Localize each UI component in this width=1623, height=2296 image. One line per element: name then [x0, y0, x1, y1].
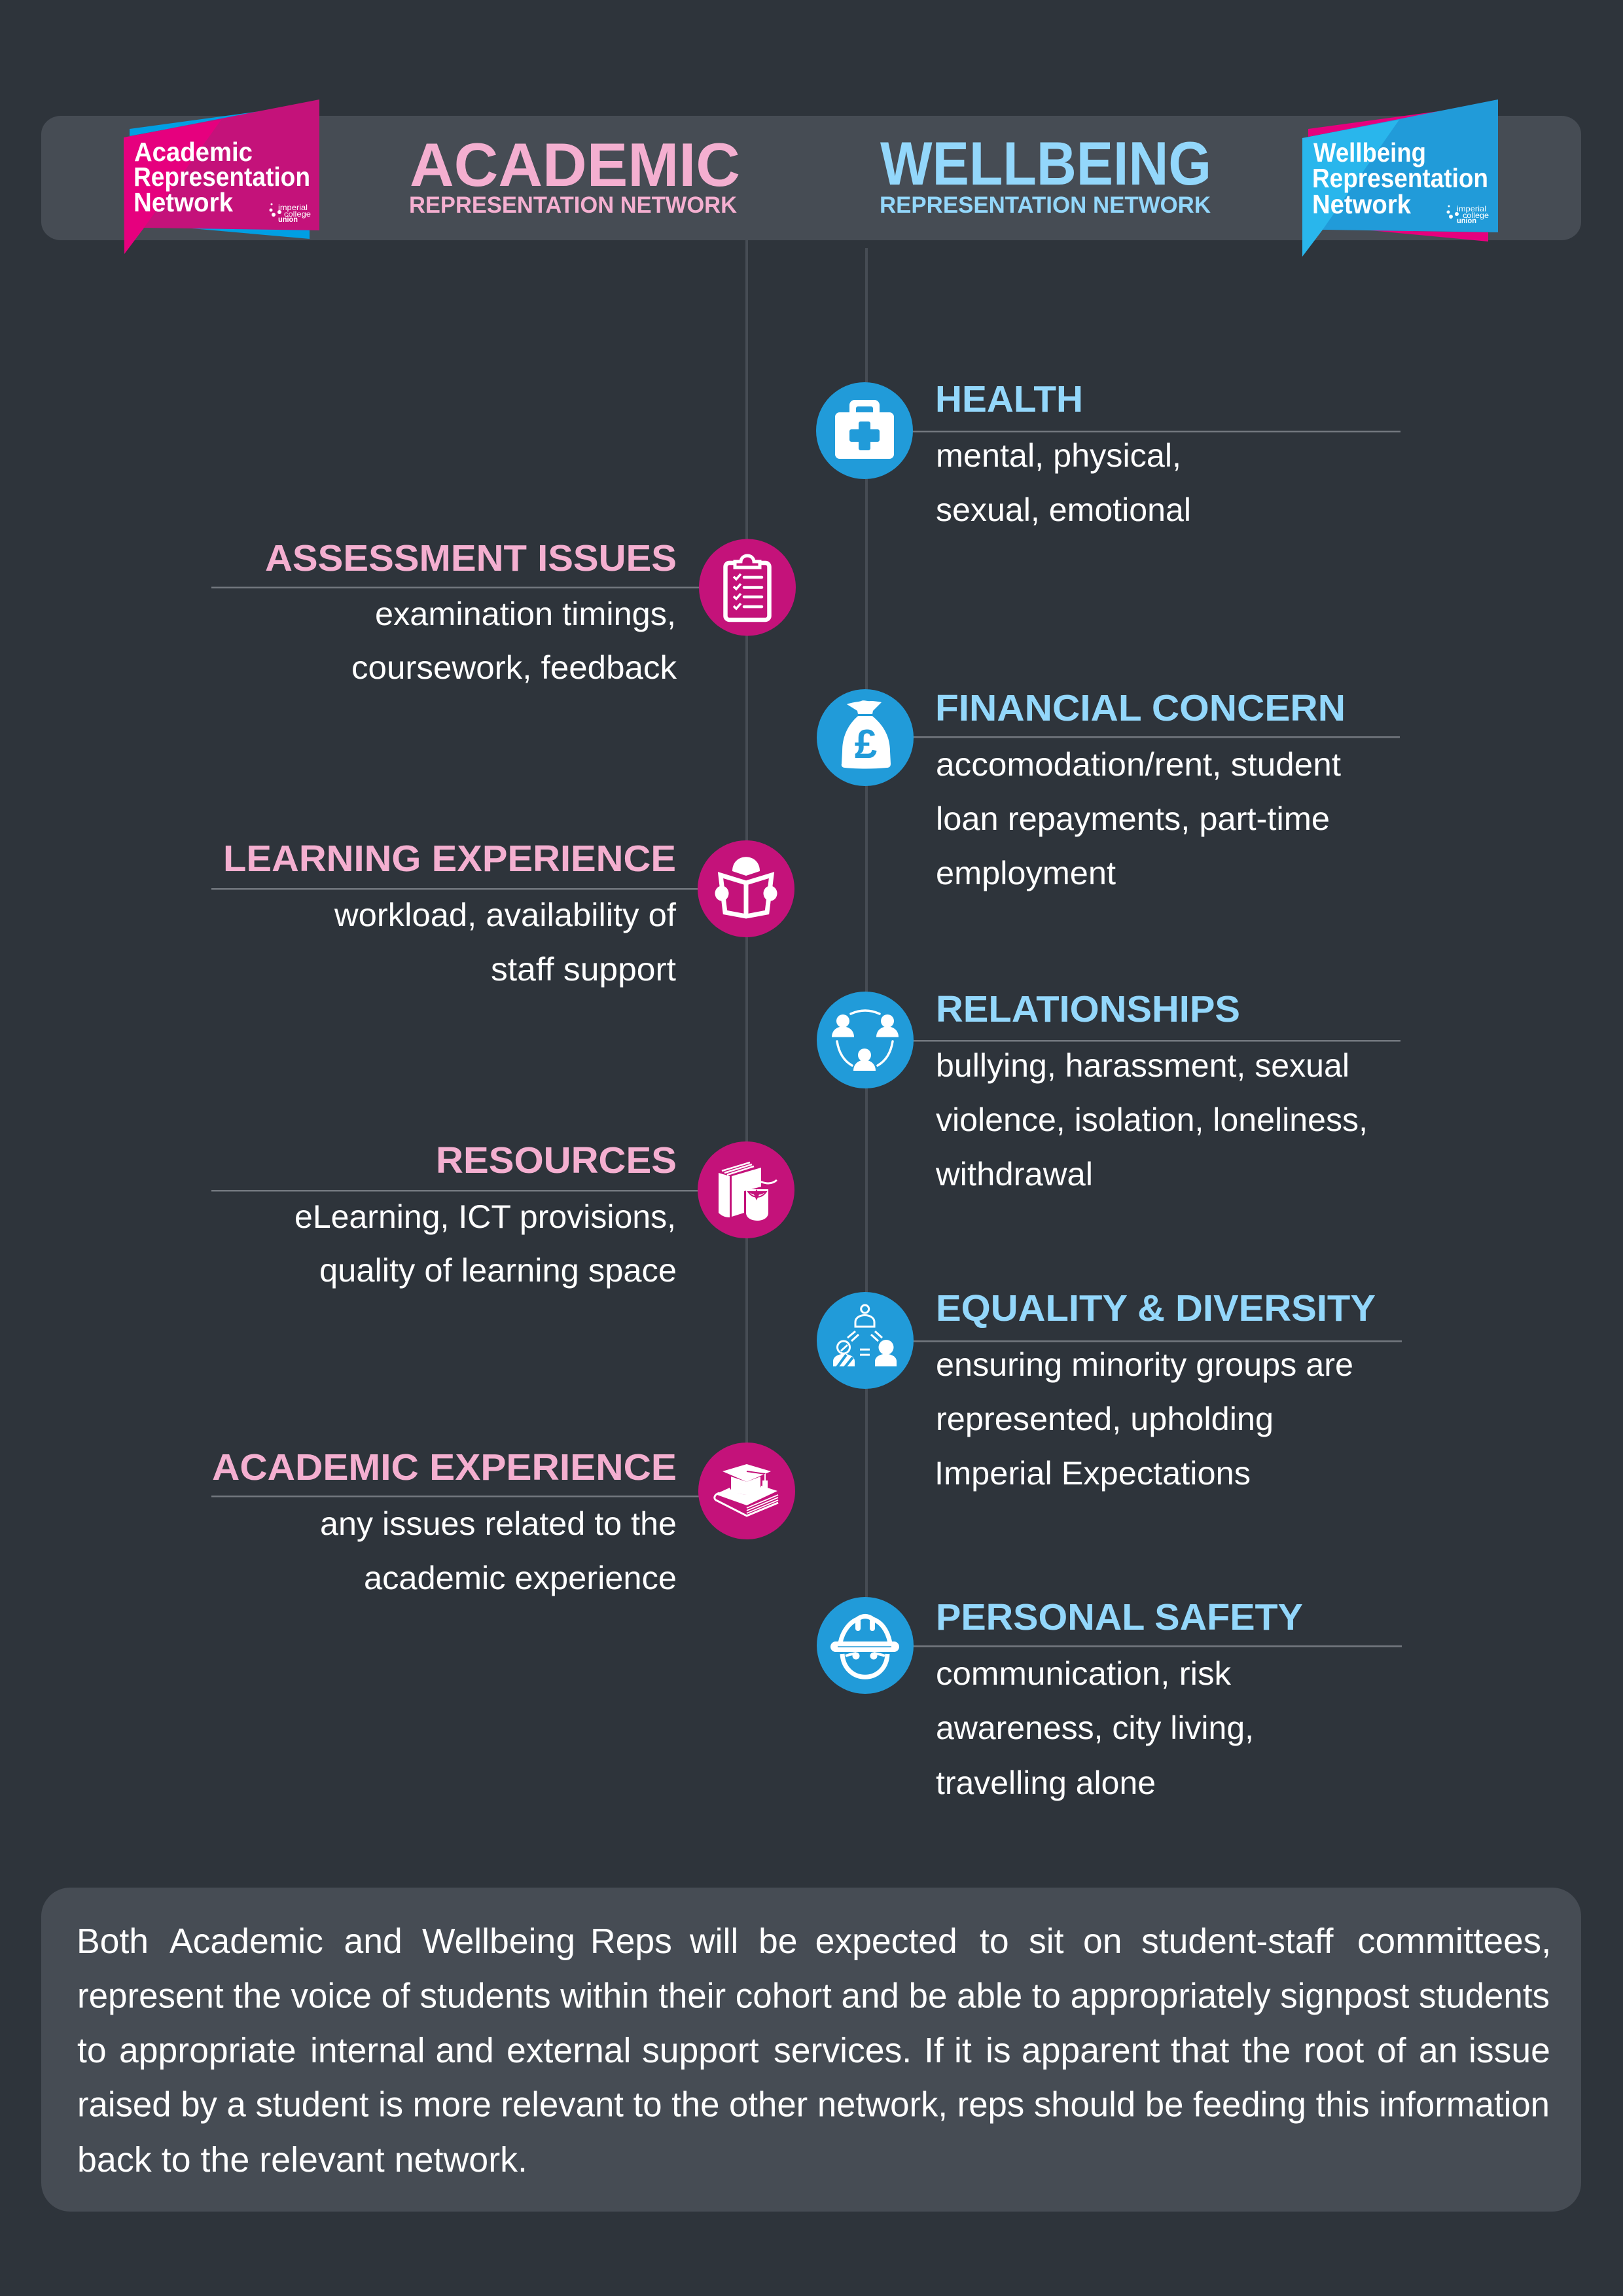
item: equality and diversity	[817, 1287, 1402, 1492]
icon: first aid kit	[835, 400, 894, 459]
item: equality and diversity: represented, upholding	[936, 1401, 1274, 1437]
logo: academic representation network	[124, 99, 319, 254]
text block: both networks expectations: root	[1304, 2032, 1364, 2070]
item: financial concern: employment	[936, 855, 1116, 891]
icon: money bag: £	[855, 722, 877, 767]
item: assessment issues: ASSESSMENT ISSUES	[265, 537, 677, 579]
text block: both networks expectations: committees,	[1357, 1920, 1551, 1961]
heading: academic: REPRESENTATION NETWORK	[409, 192, 737, 218]
text block: both networks expectations: be	[758, 1922, 798, 1961]
icon: hard hat face	[830, 1617, 899, 1677]
text block: both networks expectations: that	[1171, 2032, 1229, 2070]
item: relationships: withdrawal	[935, 1156, 1093, 1193]
text block: both networks expectations: Both	[77, 1922, 149, 1961]
text block: both networks expectations: of	[1377, 2032, 1406, 2070]
item: personal safety: PERSONAL SAFETY	[936, 1596, 1303, 1638]
text block: both networks expectations: Reps	[590, 1922, 672, 1961]
text block: both networks expectations: it	[954, 2032, 972, 2070]
logo: academic representation network: Academic	[134, 137, 253, 167]
item: assessment issues	[211, 537, 796, 686]
item: equality and diversity: ensuring minority groups are	[936, 1346, 1353, 1383]
logo: wellbeing representation network: Network	[1312, 189, 1411, 219]
text block: both networks expectations: an	[1419, 2032, 1458, 2070]
logo: academic representation network: Network	[134, 187, 233, 217]
text block: both networks expectations	[77, 1920, 1551, 2179]
text block: both networks expectations: appropriate	[119, 2032, 296, 2070]
text block: both networks expectations: issue	[1469, 2032, 1550, 2070]
item: health: HEALTH	[935, 378, 1083, 420]
academic timeline line	[745, 240, 748, 1491]
item: financial concern: accomodation/rent, student	[936, 746, 1341, 783]
item: assessment issues: coursework, feedback	[351, 649, 677, 686]
item: academic experience: any issues related to the	[320, 1505, 677, 1542]
icon: person reading	[715, 857, 777, 916]
item: academic experience: ACADEMIC EXPERIENCE	[212, 1446, 677, 1488]
icon: graduation cap on book	[715, 1464, 778, 1516]
logo: academic representation network: imperial	[278, 203, 308, 212]
text block: both networks expectations: and	[436, 2032, 494, 2070]
item: learning experience: staff support	[491, 951, 676, 988]
icon: money bag	[842, 700, 891, 768]
item: academic experience: academic experience	[364, 1560, 677, 1596]
logo: academic representation network: union	[278, 215, 298, 224]
text block: both networks expectations: the	[1242, 2032, 1291, 2070]
icon: people with equals sign	[833, 1305, 897, 1367]
item: relationships: violence, isolation, loneliness,	[936, 1102, 1368, 1138]
heading: academic: ACADEMIC	[410, 130, 740, 199]
icon: book and mouse	[719, 1162, 777, 1221]
item: resources: quality of learning space	[319, 1252, 677, 1289]
item: personal safety: communication, risk	[936, 1655, 1232, 1692]
text block: both networks expectations: sit	[1029, 1922, 1064, 1961]
item: personal safety: awareness, city living,	[936, 1710, 1254, 1746]
item: financial concern: loan repayments, part-time	[936, 800, 1330, 837]
item: equality and diversity: EQUALITY & DIVERSITY	[936, 1287, 1376, 1329]
text block: both networks expectations: will	[689, 1922, 738, 1961]
text block: both networks expectations: is	[986, 2032, 1011, 2070]
item: equality and diversity: Imperial Expectations	[935, 1455, 1251, 1492]
text block: both networks expectations: expected	[815, 1922, 957, 1961]
text block: both networks expectations: to	[77, 2032, 107, 2070]
item: learning experience: LEARNING EXPERIENCE	[223, 838, 676, 880]
logo: wellbeing representation network: imperial	[1457, 204, 1486, 213]
text block: both networks expectations: to	[980, 1922, 1009, 1961]
logo: wellbeing representation network: college	[1463, 211, 1489, 220]
text block: both networks expectations: and	[344, 1922, 402, 1961]
text block: both networks expectations: back to the relevant network.	[77, 2141, 527, 2179]
heading: wellbeing: REPRESENTATION NETWORK	[880, 192, 1211, 218]
text block: both networks expectations: on	[1083, 1922, 1122, 1961]
item: relationships: bullying, harassment, sexual	[936, 1047, 1349, 1084]
item: health: sexual, emotional	[936, 492, 1191, 528]
panel: closing note	[41, 1888, 1581, 2212]
header banner	[41, 116, 1581, 240]
heading: wellbeing: WELLBEING	[880, 129, 1211, 198]
logo: academic representation network: Representation	[134, 162, 310, 192]
text block: both networks expectations: raised by a student is more relevant to the other network, reps should be feeding this information	[77, 2085, 1550, 2125]
item: relationships	[817, 988, 1400, 1193]
text block: both networks expectations: student-staff	[1141, 1922, 1334, 1961]
text block: both networks expectations: Academic	[169, 1922, 323, 1961]
text block: both networks expectations: services.	[774, 2032, 912, 2070]
item: resources	[211, 1139, 794, 1289]
item: learning experience	[211, 838, 794, 988]
text block: both networks expectations: support	[642, 2032, 759, 2070]
text block: both networks expectations: Wellbeing	[422, 1922, 575, 1961]
text block: both networks expectations: external	[507, 2032, 631, 2070]
logo: wellbeing representation network: Wellbeing	[1313, 137, 1426, 168]
item: resources: RESOURCES	[436, 1139, 677, 1181]
text block: both networks expectations: apparent	[1022, 2032, 1160, 2070]
icon: clipboard checklist	[725, 556, 770, 620]
text block: both networks expectations: internal	[310, 2032, 425, 2070]
item: personal safety	[817, 1596, 1402, 1801]
logo: wellbeing representation network	[1302, 99, 1498, 257]
item: learning experience: workload, availability of	[334, 897, 676, 933]
item: assessment issues: examination timings,	[375, 596, 676, 632]
item: resources: eLearning, ICT provisions,	[294, 1198, 676, 1235]
item: health: mental, physical,	[936, 437, 1181, 474]
item: health	[816, 378, 1400, 528]
logo: academic representation network: college	[284, 209, 311, 219]
logo: wellbeing representation network: union	[1457, 216, 1476, 225]
icon: three connected people	[832, 1011, 899, 1071]
text block: both networks expectations: represent the voice of students within their cohort and be able to appropriately signpost students	[77, 1977, 1550, 2016]
item: personal safety: travelling alone	[936, 1765, 1156, 1801]
item: financial concern: FINANCIAL CONCERN	[935, 687, 1346, 729]
item: relationships: RELATIONSHIPS	[936, 988, 1240, 1030]
wellbeing timeline line	[865, 248, 868, 1645]
text block: both networks expectations: If	[924, 2032, 944, 2070]
logo: wellbeing representation network: Representation	[1312, 163, 1488, 193]
item: academic experience	[211, 1443, 795, 1596]
item: financial concern	[817, 687, 1400, 891]
